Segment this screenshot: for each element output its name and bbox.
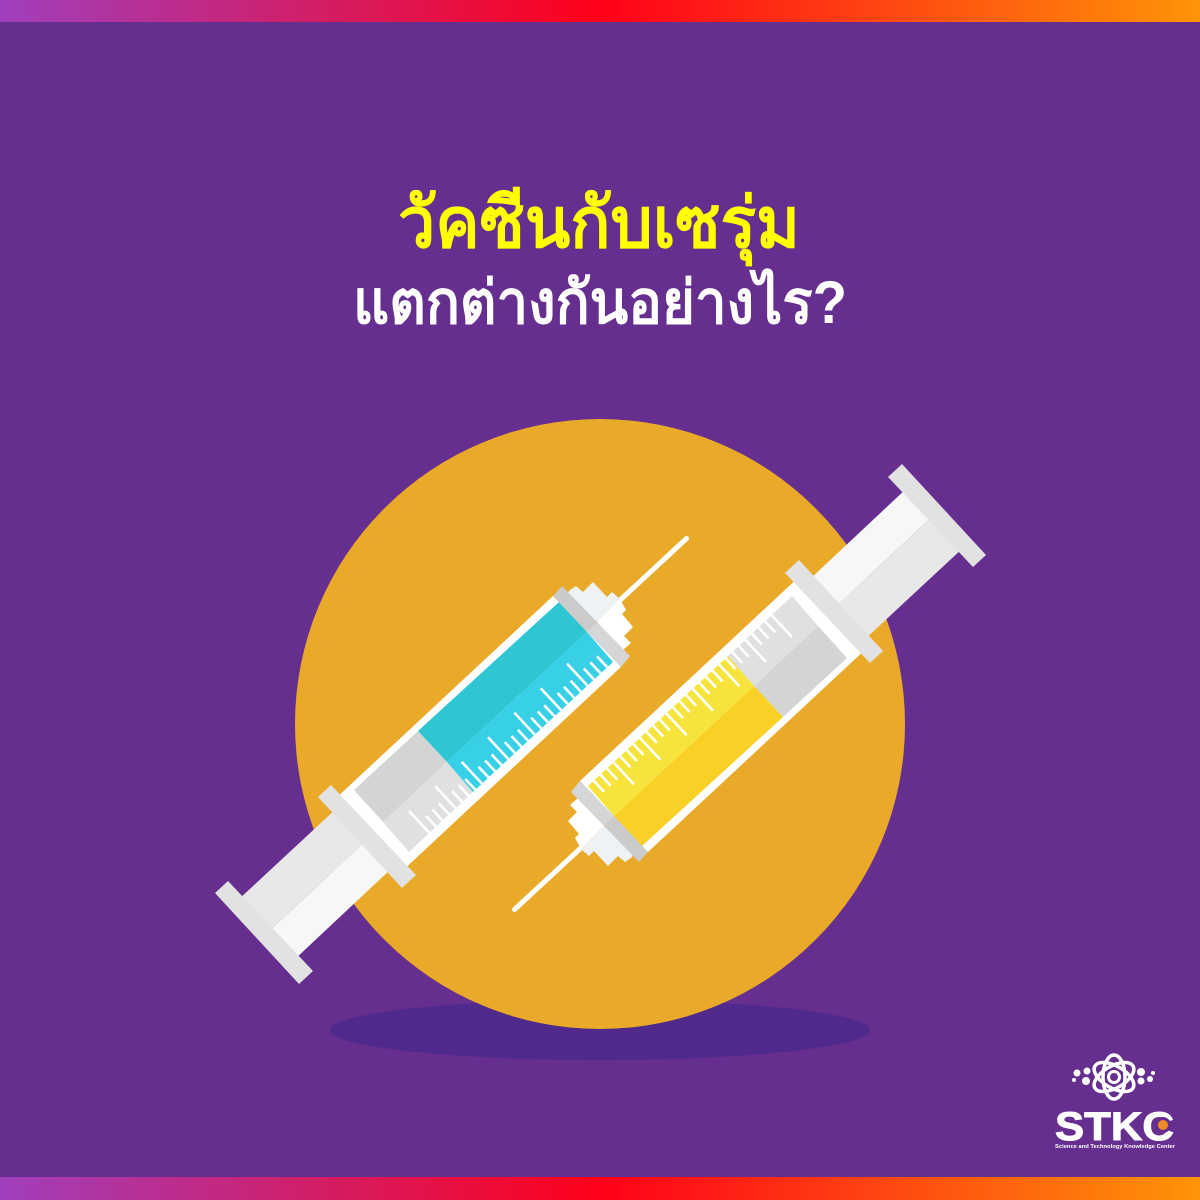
logo wordmark: STKC bbox=[1055, 1105, 1174, 1149]
needle bbox=[514, 846, 583, 910]
syringe: yellow bbox=[514, 464, 986, 910]
scale ticks bbox=[594, 615, 792, 803]
empty barrel section bbox=[728, 596, 847, 717]
needle bbox=[618, 538, 686, 602]
liquid: blue bbox=[418, 602, 613, 792]
top gradient bar bbox=[0, 0, 1200, 22]
plunger end flange bbox=[888, 464, 986, 567]
plunger end flange bbox=[215, 881, 313, 984]
logo orange dot bbox=[1158, 1120, 1168, 1130]
plunger bbox=[809, 488, 963, 640]
orange circle bbox=[295, 419, 905, 1029]
barrel flange bbox=[318, 785, 416, 888]
scale ticks bbox=[409, 645, 607, 833]
logo icon: atom bbox=[1072, 1055, 1155, 1099]
syringe: blue bbox=[215, 538, 686, 984]
title: vaccine and serum: วัคซีนกับเซรุ่ม bbox=[398, 184, 800, 267]
ground shadow bbox=[330, 1000, 870, 1060]
needle hub bbox=[568, 798, 636, 866]
logo orange dot backing bbox=[1155, 1117, 1171, 1133]
STKC logo bbox=[1055, 1055, 1176, 1150]
barrel flange bbox=[785, 560, 883, 663]
barrel bbox=[580, 575, 867, 852]
bottom gradient bar bbox=[0, 1177, 1200, 1200]
subtitle: how do they differ: แตกต่างกันอย่างไร? bbox=[353, 267, 847, 336]
barrel collar bbox=[571, 781, 648, 862]
plunger bbox=[238, 808, 392, 960]
logo tagline: Science and Technology Knowledge Center bbox=[1055, 1144, 1176, 1150]
liquid: yellow bbox=[588, 656, 783, 846]
barrel bbox=[334, 596, 621, 873]
needle hub bbox=[565, 582, 633, 650]
empty barrel section bbox=[354, 731, 473, 852]
barrel collar bbox=[553, 586, 630, 667]
